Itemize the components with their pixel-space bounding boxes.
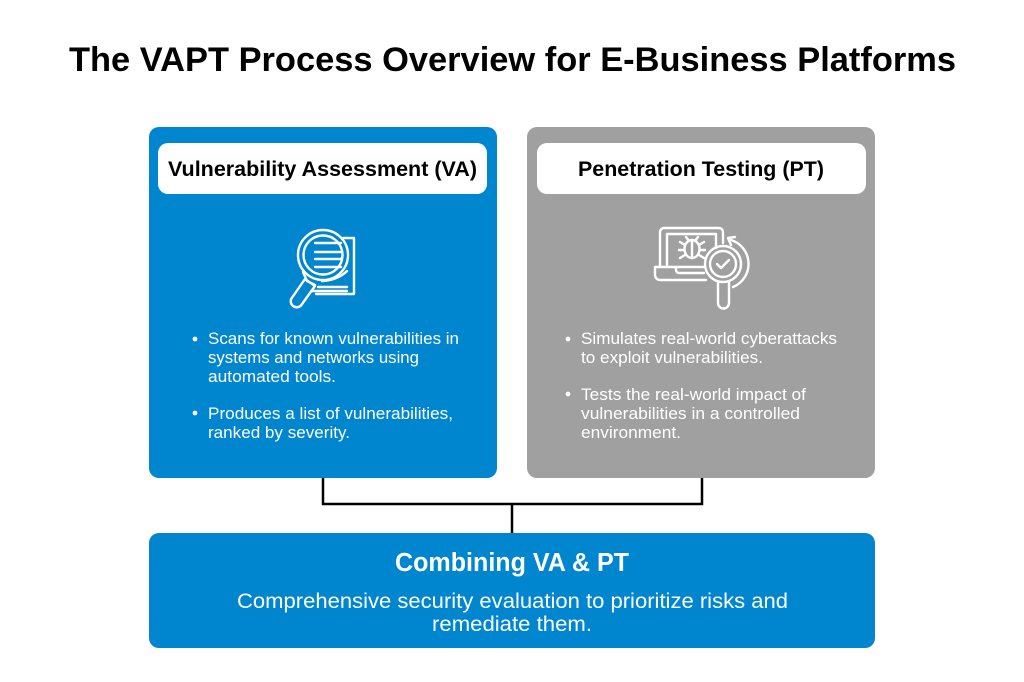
bullet list: PT: environment. [581,424,681,442]
bullet list: VA: systems and networks using [208,349,419,367]
title: The VAPT Process Overview for E-Business Platforms [69,41,956,79]
bullet list: VA: automated tools. [208,368,336,386]
summary text: remediate them. [432,612,592,636]
bullet list: VA: Produces a list of vulnerabilities, [208,405,453,423]
heading: combining VA and PT: Combining VA & PT [395,549,629,577]
summary text [237,589,788,636]
bullet list: VA: Scans for known vulnerabilities in [208,330,459,348]
icon: laptop with bug and magnifier [655,228,749,308]
icon: magnifier over document [291,230,354,307]
panel: vulnerability assessment [149,127,497,478]
heading: penetration testing [537,143,866,194]
bullet list: VA [193,330,459,442]
panel: combining VA and PT [149,533,875,648]
bullet list: PT: Simulates real-world cyberattacks [581,330,837,348]
bullet list: VA: ranked by severity. [208,424,350,442]
bullet list: PT: to exploit vulnerabilities. [581,349,763,367]
heading: penetration testing: Penetration Testing (PT) [578,158,824,181]
connector: panels to summary [323,478,702,533]
heading: vulnerability assessment [158,143,487,194]
heading: vulnerability assessment: Vulnerability Assessment (VA) [168,158,477,181]
summary text: Comprehensive security evaluation to prioritize risks and [237,589,788,613]
bullet list: PT: vulnerabilities in a controlled [581,405,800,423]
panel: penetration testing [527,127,875,478]
bullet list: PT [566,330,837,442]
bullet list: PT: Tests the real-world impact of [581,386,806,404]
